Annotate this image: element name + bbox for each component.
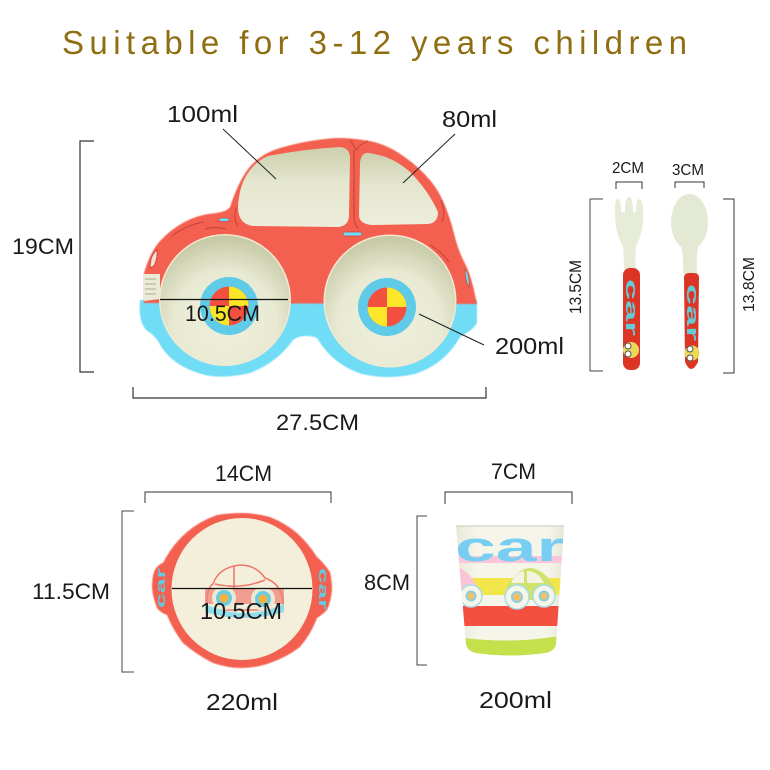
plate width dimension <box>133 387 486 435</box>
cup width dimension: 7CM <box>491 459 536 484</box>
cup capacity: 200ml <box>479 687 552 713</box>
handle lettering: car <box>316 568 331 610</box>
cup lettering: car <box>455 523 565 570</box>
door handles <box>219 218 469 287</box>
fork width dimension <box>612 160 644 189</box>
panel: spoon <box>671 194 708 369</box>
green car <box>506 568 555 600</box>
plate width dimension: 27.5CM <box>276 410 359 435</box>
cup width dimension <box>445 459 572 504</box>
bowl interior <box>172 518 312 660</box>
plate capacity label: 200ml: 200ml <box>495 333 564 359</box>
yellow band <box>472 578 560 595</box>
red band <box>462 606 559 626</box>
bowl diameter <box>172 588 312 624</box>
fork width dimension: 2CM <box>612 160 644 177</box>
left wheel bowl <box>159 234 291 366</box>
spoon width dimension <box>672 162 704 188</box>
handle lettering: car <box>153 568 168 608</box>
spoon width dimension: 3CM <box>672 162 704 179</box>
handle lettering <box>153 568 331 610</box>
cup rim <box>456 525 564 527</box>
panel: bowl <box>152 513 332 668</box>
panel: fork: car <box>622 279 641 337</box>
plate capacity label: 100ml <box>167 101 276 179</box>
plate base: blue lower body <box>140 300 477 377</box>
cup height dimension: 8CM <box>364 570 410 595</box>
plate upper: red car body <box>144 138 477 304</box>
panel: fork <box>615 197 643 370</box>
bowl width dimension <box>145 461 331 503</box>
bowl capacity: 220ml <box>206 689 278 715</box>
plate capacity label: 80ml: 80ml <box>442 106 497 132</box>
plate height dimension <box>12 141 94 372</box>
cup height dimension <box>364 516 427 665</box>
panel: spoon: car <box>683 284 702 342</box>
bowl diameter: 10.5CM <box>200 598 282 624</box>
panel: cup <box>456 526 564 656</box>
bowl height dimension <box>32 511 134 672</box>
grille <box>144 274 160 301</box>
plate capacity label: 200ml <box>419 314 564 359</box>
plate wheel diameter: 10.5CM <box>185 301 260 326</box>
title: Suitable for 3-12 years children <box>62 24 687 61</box>
bowl width dimension: 14CM <box>215 461 272 486</box>
bowl rim and handles <box>152 513 332 668</box>
plate height dimension: 19CM <box>12 234 74 259</box>
lime base <box>466 636 556 656</box>
bowl height dimension: 11.5CM <box>32 579 110 604</box>
right wheel bowl: 200ml <box>324 234 456 368</box>
plate capacity label: 80ml <box>403 106 497 183</box>
headlight <box>150 250 157 268</box>
fork length dimension: 13.5CM <box>567 260 585 314</box>
spoon length dimension: 13.8CM <box>741 257 758 312</box>
plate wheel diameter <box>160 300 288 326</box>
plate capacity label: 100ml: 100ml <box>167 101 238 127</box>
spoon length dimension <box>723 199 758 373</box>
left window compartment: 100ml <box>238 147 350 227</box>
pink car <box>460 568 477 600</box>
pink band <box>458 556 562 563</box>
body details <box>172 140 449 262</box>
panel: car plate <box>140 138 477 377</box>
fork length dimension <box>567 199 603 371</box>
bowl car picture <box>205 565 284 618</box>
right window compartment: 80ml <box>359 153 438 225</box>
